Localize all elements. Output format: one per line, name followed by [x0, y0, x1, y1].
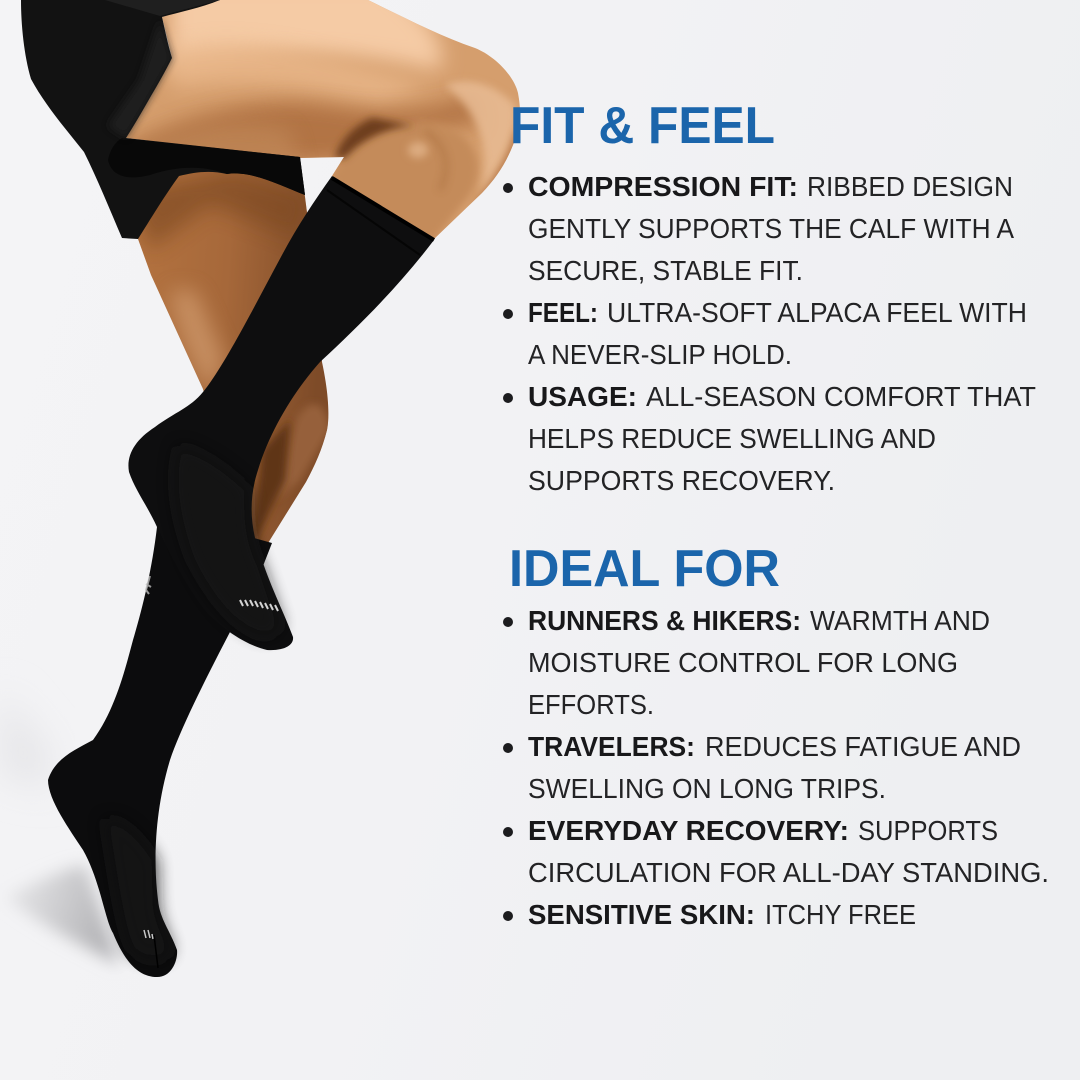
- item: travelers: SWELLING ON LONG TRIPS.: [528, 773, 886, 804]
- supporting leg thigh and calf: [130, 165, 330, 548]
- raised leg sock and foot: [128, 176, 434, 650]
- sock cuff behind foot: [254, 538, 272, 566]
- item: sensitive skin: [503, 899, 916, 930]
- photo: athlete legs wearing black compression socks: [21, 0, 530, 977]
- list: ideal for: [503, 605, 1049, 930]
- item: everyday recovery: CIRCULATION FOR ALL-DAY STANDING.: [528, 857, 1049, 888]
- item: compression fit: RIBBED DESIGN: [807, 171, 1013, 202]
- lower leg sock, standing on toes: [48, 520, 245, 977]
- item: usage: [503, 381, 1036, 496]
- item: runners and hikers: RUNNERS & HIKERS:: [528, 605, 801, 636]
- raised thigh and knee: [120, 0, 530, 245]
- list: fit and feel: [503, 171, 1036, 496]
- item: travelers: TRAVELERS:: [528, 731, 695, 762]
- item: runners and hikers: [503, 605, 990, 720]
- item: everyday recovery: SUPPORTS: [858, 815, 998, 846]
- item: runners and hikers: EFFORTS.: [528, 689, 654, 720]
- item: feel: ULTRA-SOFT ALPACA FEEL WITH: [607, 297, 1027, 328]
- item: usage: ALL-SEASON COMFORT THAT: [646, 381, 1036, 412]
- item: everyday recovery: [503, 815, 1049, 888]
- heading: ideal for: IDEAL FOR: [509, 540, 780, 598]
- item: travelers: REDUCES FATIGUE AND: [705, 731, 1021, 762]
- item: everyday recovery: EVERYDAY RECOVERY:: [528, 815, 849, 846]
- item: travelers: [503, 731, 1021, 804]
- item: usage: USAGE:: [528, 381, 637, 412]
- item: sensitive skin: SENSITIVE SKIN:: [528, 899, 755, 930]
- item: compression fit: SECURE, STABLE FIT.: [528, 255, 803, 286]
- black running shorts: [21, 0, 305, 239]
- item: runners and hikers: MOISTURE CONTROL FOR LONG: [528, 647, 958, 678]
- item: compression fit: [503, 171, 1014, 286]
- item: feel: [503, 297, 1027, 370]
- heading: fit and feel: FIT & FEEL: [510, 97, 775, 155]
- item: usage: SUPPORTS RECOVERY.: [528, 465, 835, 496]
- item: usage: HELPS REDUCE SWELLING AND: [528, 423, 936, 454]
- item: feel: FEEL:: [528, 297, 598, 328]
- floor shadow: [0, 690, 120, 965]
- item: feel: A NEVER-SLIP HOLD.: [528, 339, 792, 370]
- item: sensitive skin: ITCHY FREE: [765, 899, 916, 930]
- item: compression fit: GENTLY SUPPORTS THE CALF WITH A: [528, 213, 1014, 244]
- item: runners and hikers: WARMTH AND: [810, 605, 990, 636]
- item: compression fit: COMPRESSION FIT:: [528, 171, 798, 202]
